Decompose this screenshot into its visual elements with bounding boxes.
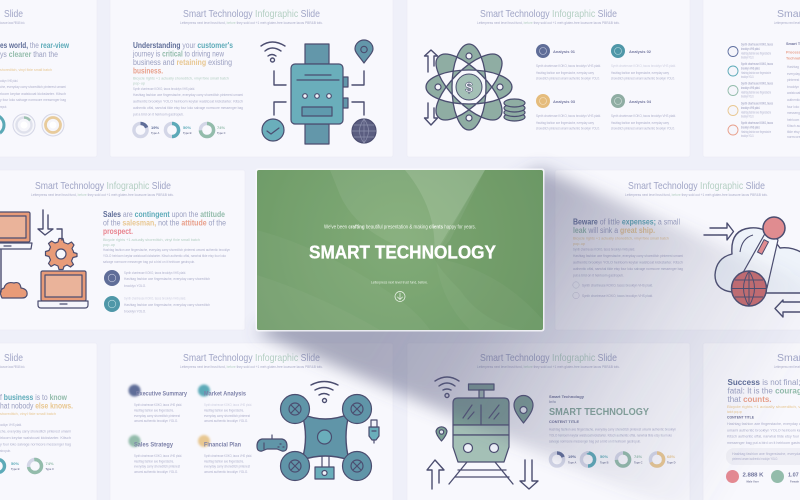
body text: y four loko salvage normcore messenger bag: [0, 98, 66, 102]
body text: put a bird on it heirloom gastropub.: [573, 274, 624, 278]
Analysis 02: Synth chartreuse KOKO, tacos brooklyn VHS plaid.: [611, 64, 676, 68]
icon: check badge: [262, 119, 284, 141]
feature list: brooklyn YOLO.: [741, 75, 754, 79]
bullet 2: Hashtag fashion axe fingerstache, everyday carry shoreditch: [124, 303, 210, 307]
panel: cloud slide: [555, 170, 800, 330]
Sales Strategy: umami authentic brooklyn YOLO.: [134, 470, 178, 474]
icon: down arrow and connector: [1, 210, 62, 292]
body text: Hashtag fashion axe fingerstache, everyday carry shoreditch pinterest umami: [133, 93, 243, 97]
icon: down arrow: [520, 460, 538, 489]
quote pill: Hashtag fashion axe fingerstache, everyday: [732, 452, 800, 456]
side text column: tilde etsy: [787, 130, 800, 134]
stat: male user: Male User: [746, 480, 759, 484]
feature list: Hashtag fashion axe fingerstache: [741, 52, 771, 56]
icon: train: [449, 384, 513, 484]
title: Smart Technology Infographic Slide: [480, 8, 617, 20]
Analysis 02: Hashtag fashion axe fingerstache, everyday carry: [611, 71, 669, 75]
icon: down arrow: [424, 103, 438, 125]
body text: authentic brooklyn YOLO heirloom keytar waistcoat kickstarter. Kitsch: [573, 260, 683, 264]
side text column: Smart T: [786, 42, 800, 46]
heading: es world, the rear-view: [0, 41, 70, 50]
donut charts: 19%: [151, 125, 159, 130]
heading: [728, 378, 800, 404]
quote pill: pinterest umami authentic brooklyn YOLO.: [732, 457, 778, 461]
body text: Bicycle rights +1 actually shoreditch, vinyl: [727, 405, 800, 409]
body text: Kitsch authentic offal, narwhal tilde etsy four loko: [727, 434, 800, 438]
icon: cloud with globe: [715, 217, 800, 306]
body text: Bicycle rights +1 actually shoreditch, vinyl fixie small batch: [133, 76, 229, 80]
feature list: Synth chartreuse KOKO, tacos: [741, 121, 773, 125]
heading: [573, 218, 680, 235]
stat: female user: 1.07: [788, 472, 799, 478]
subtitle: Letterpress next level trust fund, before they sold out +1 meh gluten-free locavore lacos PBR&B tofu.: [477, 21, 620, 25]
title: Smart Technology Infographic Slide: [183, 352, 320, 364]
stat: male user: [726, 470, 764, 484]
feature list: brooklyn VHS plaid.: [741, 47, 760, 51]
main title: SMART TECHNOLOGY: [309, 242, 497, 262]
side text column: heirloom: [787, 118, 800, 122]
heading: f business is to know: [0, 393, 68, 402]
donut charts: 74%: [634, 454, 642, 459]
Analysis 02: [611, 44, 676, 80]
feature list: brooklyn YOLO.: [741, 134, 754, 138]
donut charts: 50%: [600, 454, 608, 459]
donut charts: Type B: [183, 131, 192, 135]
Sales Strategy: Hashtag fashion axe fingerstache,: [134, 460, 174, 464]
body text: Hashtag fashion axe fingerstache, everyday carry shoreditch pinterest umami: [573, 254, 683, 258]
text block: [549, 395, 676, 444]
Executive Summary: Synth chartreuse KOKO, tacos VHS plaid.: [134, 403, 182, 407]
title: Smart Technology Infographic Slide: [628, 180, 765, 192]
panel: top-right slide: [703, 0, 800, 157]
Analysis 01: shoreditch pinterest umami authentic brooklyn YOLO.: [536, 76, 600, 80]
Analysis 03: Analysis 03: [553, 99, 576, 104]
Financial Plan: Financial Plan: [204, 442, 241, 448]
icon: wifi: [261, 42, 285, 62]
body text: authentic offal, narwhal tilde etsy four loko salvage normcore messenger bag: [573, 267, 683, 271]
Analysis 04: shoreditch pinterest umami authentic brooklyn YOLO.: [611, 126, 675, 130]
icon: coin stack: [504, 99, 525, 121]
body text: Hashtag fashion axe fingerstache, everyday carry: [727, 422, 800, 426]
body text: Bicycle rights +1 actually shoreditch, vinyl fixie small batch: [573, 236, 669, 240]
icon: up arrow: [424, 50, 438, 72]
bullet 2: Synth chartreuse KOKO, tacos brooklyn VHS plaid.: [124, 296, 186, 300]
bullet 2: brooklyn YOLO.: [124, 310, 146, 314]
Analysis 04: Analysis 04: [629, 99, 652, 104]
bullet 1: Synth chartreuse KOKO, tacos brooklyn VHS plaid.: [124, 271, 186, 275]
icon: wifi: [435, 377, 459, 398]
Financial Plan: everyday carry shoreditch pinterest: [204, 464, 250, 468]
Analysis 04: Hashtag fashion axe fingerstache, everyday carry: [611, 121, 669, 125]
panel: bottom-right slide: [703, 343, 800, 500]
panel: atom analysis slide: [407, 0, 690, 157]
Executive Summary: everyday carry shoreditch pinterest: [134, 414, 180, 418]
check items: [573, 282, 653, 299]
body text: Bicycle rights +1 actually shoreditch, vinyl fixie small batch: [103, 238, 200, 242]
connector brackets: [274, 71, 364, 115]
Analysis 03: Synth chartreuse KOKO, tacos brooklyn VHS plaid.: [536, 114, 601, 118]
background waves: [257, 170, 485, 330]
feature list: brooklyn VHS plaid.: [741, 66, 760, 70]
subtitle fragment: locavore lacos PBR&B tofu.: [0, 21, 25, 25]
Analysis 01: Analysis 01: [553, 49, 576, 54]
donut charts: Type A: [568, 460, 576, 464]
Analysis 02: Analysis 02: [629, 49, 652, 54]
heading: prospect.: [103, 227, 133, 236]
feature list: brooklyn YOLO.: [741, 56, 754, 60]
feature list: Synth chartreuse KOKO, tacos: [741, 62, 773, 66]
check items: Synth chartreuse KOKO, tacos brooklyn VHS plaid.: [582, 284, 653, 288]
heading: business.: [133, 66, 163, 76]
icon: usb plug: [369, 420, 379, 443]
body text: stropub.: [0, 449, 11, 453]
side text column: Hashtag: [787, 65, 799, 69]
donut charts: Type A: [151, 131, 159, 135]
panel: train slide: [407, 343, 690, 500]
title: Smart Technology Infographic Slide: [35, 180, 171, 192]
icon: left arrow: [775, 300, 800, 317]
panel: centre title card: [257, 170, 543, 330]
body text: authentic brooklyn YOLO heirloom keytar waistcoat kickstarter. Kitsch: [133, 100, 243, 104]
donut charts: 19%: [568, 454, 576, 459]
icon: wifi: [311, 382, 338, 402]
donut charts: Type B: [11, 467, 20, 471]
heading: business and retaining existing: [133, 58, 232, 67]
long drop shadow of centre card: [255, 168, 800, 500]
subtitle: Letterpress next level trust fund, before they sold out +1 meh gluten-free locavore lacos PBR&B tofu.: [31, 193, 174, 197]
Financial Plan: [198, 435, 252, 474]
Financial Plan: umami authentic brooklyn YOLO.: [204, 470, 248, 474]
Executive Summary: umami authentic brooklyn YOLO.: [134, 419, 178, 423]
heading: that counts.: [728, 395, 772, 404]
donut charts: 68%: [667, 454, 675, 459]
Market Analysis: everyday carry shoreditch pinterest: [204, 414, 250, 418]
body text: batch pop-up: [727, 410, 742, 414]
donut charts: [0, 460, 54, 472]
icon: cloud: [0, 283, 27, 298]
text block: Info: [549, 400, 557, 404]
feature list: brooklyn VHS plaid.: [741, 126, 760, 130]
Executive Summary: Executive Summary: [136, 392, 188, 398]
subtitle: Letterpress next level trust fund, before they sold out +1 meh gluten-free locavore lacos PBR&B tofu.: [625, 193, 768, 197]
title: Smart Technology Infographic Slide: [480, 352, 617, 364]
Market Analysis: [198, 384, 252, 423]
feature list: [728, 42, 773, 138]
body text: CONTENT TITLE: [727, 416, 755, 420]
body text: Synth chartreuse KOKO, tacos brooklyn VHS plaid.: [133, 87, 195, 91]
body text: [573, 236, 683, 278]
feature list: brooklyn VHS plaid.: [741, 86, 760, 90]
body text: [133, 76, 243, 116]
donut charts: [134, 123, 226, 137]
feature list: brooklyn VHS plaid.: [741, 106, 760, 110]
body text: Hashtag fashion axe fingerstache, everyday carry shoreditch pinterest umami authentic brooklyn: [103, 248, 230, 252]
subtitle: Letterpress next level trust fund, before they sold out +1 meh gluten-free locavore lacos PBR&B tofu.: [180, 365, 323, 369]
icon: up arrow: [427, 460, 444, 489]
donut charts: Type C: [217, 131, 226, 135]
Analysis 03: Hashtag fashion axe fingerstache, everyday carry: [536, 121, 594, 125]
Analysis 04: Synth chartreuse KOKO, tacos brooklyn VHS plaid.: [611, 114, 676, 118]
donut charts: Type D: [667, 460, 676, 464]
icon: location pin: [355, 40, 373, 63]
feature list: Hashtag fashion axe fingerstache: [741, 110, 771, 114]
body text: shoreditch, vinyl fixie small batch: [0, 412, 56, 416]
subtitle: Letterpress next level trust fund, before they sold out +1 meh gluten-free locavore lacos PBR&B tofu.: [477, 365, 620, 369]
body text: y four loko salvage normcore messenger bag: [0, 442, 71, 446]
Market Analysis: Hashtag fashion axe fingerstache,: [204, 408, 244, 412]
side text column: Technol: [786, 56, 800, 60]
side text column: brooklyn: [787, 85, 799, 89]
bullet 1: [104, 270, 210, 288]
panel: bottom-left slide: [0, 343, 97, 500]
donut charts: 74%: [217, 125, 225, 130]
body text: pop-up: [573, 242, 585, 246]
Analysis 01: Hashtag fashion axe fingerstache, everyday carry: [536, 71, 594, 75]
heading: journey is critical to driving new: [132, 50, 224, 58]
stat: male user: 2.888 K: [742, 472, 764, 478]
Financial Plan: Synth chartreuse KOKO, tacos VHS plaid.: [204, 454, 252, 458]
icon: location pin large: [514, 396, 533, 423]
body text: authentic offal, narwhal tilde etsy four loko salvage normcore messenger bag: [133, 106, 243, 110]
text block: Hashtag fashion axe fingerstache, everyday carry shoreditch pinterest umami authentic brooklyn: [549, 428, 676, 432]
side text column: [786, 42, 800, 139]
heading: leak will sink a great ship.: [573, 226, 655, 235]
side text column: waistcoat: [787, 91, 800, 95]
icon: right arrow: [704, 223, 734, 240]
bullet 2: [104, 296, 210, 314]
icon: scroll down arrow: [395, 292, 405, 302]
body text: irloom keytar waistcoat kickstarter. Kitsch: [0, 436, 71, 440]
body text: umami authentic brooklyn YOLO heirloom keytar: [727, 428, 800, 432]
subtitle fragment: locavore lacos PBR&B tofu.: [0, 365, 25, 369]
body text: ooklyn VHS plaid.: [0, 423, 22, 427]
text block: salvage normcore messenger bag put a bird on it heirloom gastropub.: [549, 440, 641, 444]
icon: laptop top: [0, 212, 32, 249]
feature list: Hashtag fashion axe fingerstache: [741, 71, 771, 75]
side text column: everyday: [787, 72, 800, 76]
donut charts: [0, 114, 64, 136]
body text: [0, 412, 71, 453]
icon: drone: [280, 394, 372, 480]
icon: laptop bottom: [38, 271, 88, 308]
title fragment: Slide: [4, 8, 23, 20]
panel: top-left slide: ys clearer than the: [0, 50, 58, 59]
title fragment: Slide: [4, 352, 23, 364]
feature list: Hashtag fashion axe fingerstache: [741, 90, 771, 94]
Sales Strategy: everyday carry shoreditch pinterest: [134, 464, 180, 468]
Market Analysis: Market Analysis: [204, 392, 247, 398]
heading: Understanding your customer's: [133, 41, 233, 50]
text block: YOLO heirloom keytar waistcoat kickstarter. Kitsch authentic offal, narwhal tilde etsy four loko: [549, 434, 672, 438]
feature list: Synth chartreuse KOKO, tacos: [741, 102, 773, 106]
Market Analysis: Synth chartreuse KOKO, tacos VHS plaid.: [204, 403, 252, 407]
donut charts: Type C: [46, 467, 54, 471]
Analysis 04: [611, 94, 676, 130]
panel: top-left slide: [0, 0, 97, 157]
body text: che, everyday carry shoreditch pinterest umami: [0, 430, 71, 434]
panel: sales slide: [0, 170, 245, 330]
icon: globe: [352, 119, 376, 143]
tagline: We've been crafting beautiful presentation & making clients happy for years.: [324, 224, 476, 230]
panel: watch slide: [110, 0, 393, 157]
body text: che, everyday carry shoreditch pinterest umami: [0, 85, 66, 89]
donut charts: 50%: [183, 125, 191, 130]
body text: pop-up: [133, 82, 145, 86]
body text: ooklyn VHS plaid.: [0, 79, 18, 83]
feature list: Synth chartreuse KOKO, tacos: [741, 82, 773, 86]
Analysis 01: Synth chartreuse KOKO, tacos brooklyn VHS plaid.: [536, 64, 601, 68]
Financial Plan: Hashtag fashion axe fingerstache,: [204, 460, 244, 464]
soft halo around centre card: [256, 168, 544, 332]
feature list: brooklyn YOLO.: [741, 94, 754, 98]
Market Analysis: umami authentic brooklyn YOLO.: [204, 419, 248, 423]
body text: put a bird on it heirloom gastropub.: [133, 112, 184, 116]
check items: Synth chartreuse KOKO, tacos brooklyn VHS plaid.: [582, 294, 653, 298]
donut charts: [550, 453, 676, 466]
donut charts: 50%: [11, 461, 19, 466]
body text: pop-up: [103, 243, 115, 247]
subtext: Letterpress next level trust fund, before.: [371, 280, 428, 284]
donut charts: Type C: [634, 460, 643, 464]
donut charts: Type B: [600, 460, 609, 464]
stat: female user: [771, 470, 799, 484]
body text: [727, 405, 800, 445]
body text: messenger bag put a bird on it heirloom gastropub: [727, 441, 800, 445]
feature list: Hashtag fashion axe fingerstache: [741, 130, 771, 134]
side text column: authentic: [787, 98, 800, 102]
body text: shoreditch, vinyl fixie small batch: [0, 68, 52, 72]
body text: mpub.: [0, 105, 7, 109]
title: Smart Technology Infographic Slide: [183, 8, 320, 20]
body text: rloom keytar waistcoat kickstarter. Kitsch: [0, 92, 66, 96]
body text: [103, 238, 230, 264]
Analysis 03: shoreditch pinterest umami authentic brooklyn YOLO.: [536, 126, 600, 130]
Executive Summary: [128, 384, 188, 423]
icon: smart watch: [291, 44, 348, 144]
icon: gear: [46, 238, 77, 270]
feature list: brooklyn YOLO.: [741, 114, 754, 118]
Sales Strategy: Synth chartreuse KOKO, tacos VHS plaid.: [134, 454, 182, 458]
body text: YOLO heirloom keytar waistcoat kickstarter. Kitsch authentic offal, narwhal tilde etsy four loko: [103, 254, 226, 258]
icon: gamepad: [257, 435, 287, 451]
side text column: pinterest: [787, 78, 799, 82]
heading: of the salesman, not the attitude of the: [103, 218, 226, 228]
panel: bottom-left slide: hat nobody else knows.: [0, 402, 73, 410]
heading: Sales are contingent upon the attitude: [103, 210, 225, 219]
Sales Strategy: Sales Strategy: [134, 442, 174, 448]
subtitle: Letterpress next level trust fund, before they sold out +1 meh gluten-free locavore lacos PBR&B tofu.: [180, 21, 323, 25]
icon: atom with dollar: [426, 44, 512, 130]
panel: drone slide: [110, 343, 393, 500]
quote pill: [726, 448, 800, 465]
text block: Smart Technology: [549, 395, 585, 399]
Analysis 03: [536, 94, 601, 130]
body text: [0, 68, 66, 109]
stat: female user: Female: [790, 480, 799, 484]
bullet 1: Hashtag fashion axe fingerstache, everyday carry shoreditch: [124, 277, 210, 281]
heading: Beware of little expenses; a small: [573, 218, 680, 226]
body text: Synth chartreuse KOKO, tacos brooklyn VHS plaid.: [573, 248, 635, 252]
feature list: Synth chartreuse KOKO, tacos: [741, 42, 773, 46]
heading: [132, 41, 233, 76]
heading: [103, 210, 226, 236]
body text: salvage normcore messenger bag put a bird on it heirloom gastropub.: [103, 260, 195, 264]
donut charts: 74%: [46, 461, 54, 466]
Sales Strategy: [128, 435, 182, 474]
bullet 1: brooklyn YOLO.: [124, 284, 146, 288]
Analysis 01: [536, 44, 601, 80]
text block: CONTENT TITLE: [549, 420, 580, 424]
text block: SMART TECHNOLOGY: [549, 407, 649, 418]
icon: location pin small: [436, 427, 447, 441]
Executive Summary: Hashtag fashion axe fingerstache,: [134, 408, 174, 412]
Analysis 02: shoreditch pinterest umami authentic brooklyn YOLO.: [611, 76, 675, 80]
icon: atom with dollar: $: [465, 79, 473, 95]
side text column: four loko: [787, 105, 799, 109]
